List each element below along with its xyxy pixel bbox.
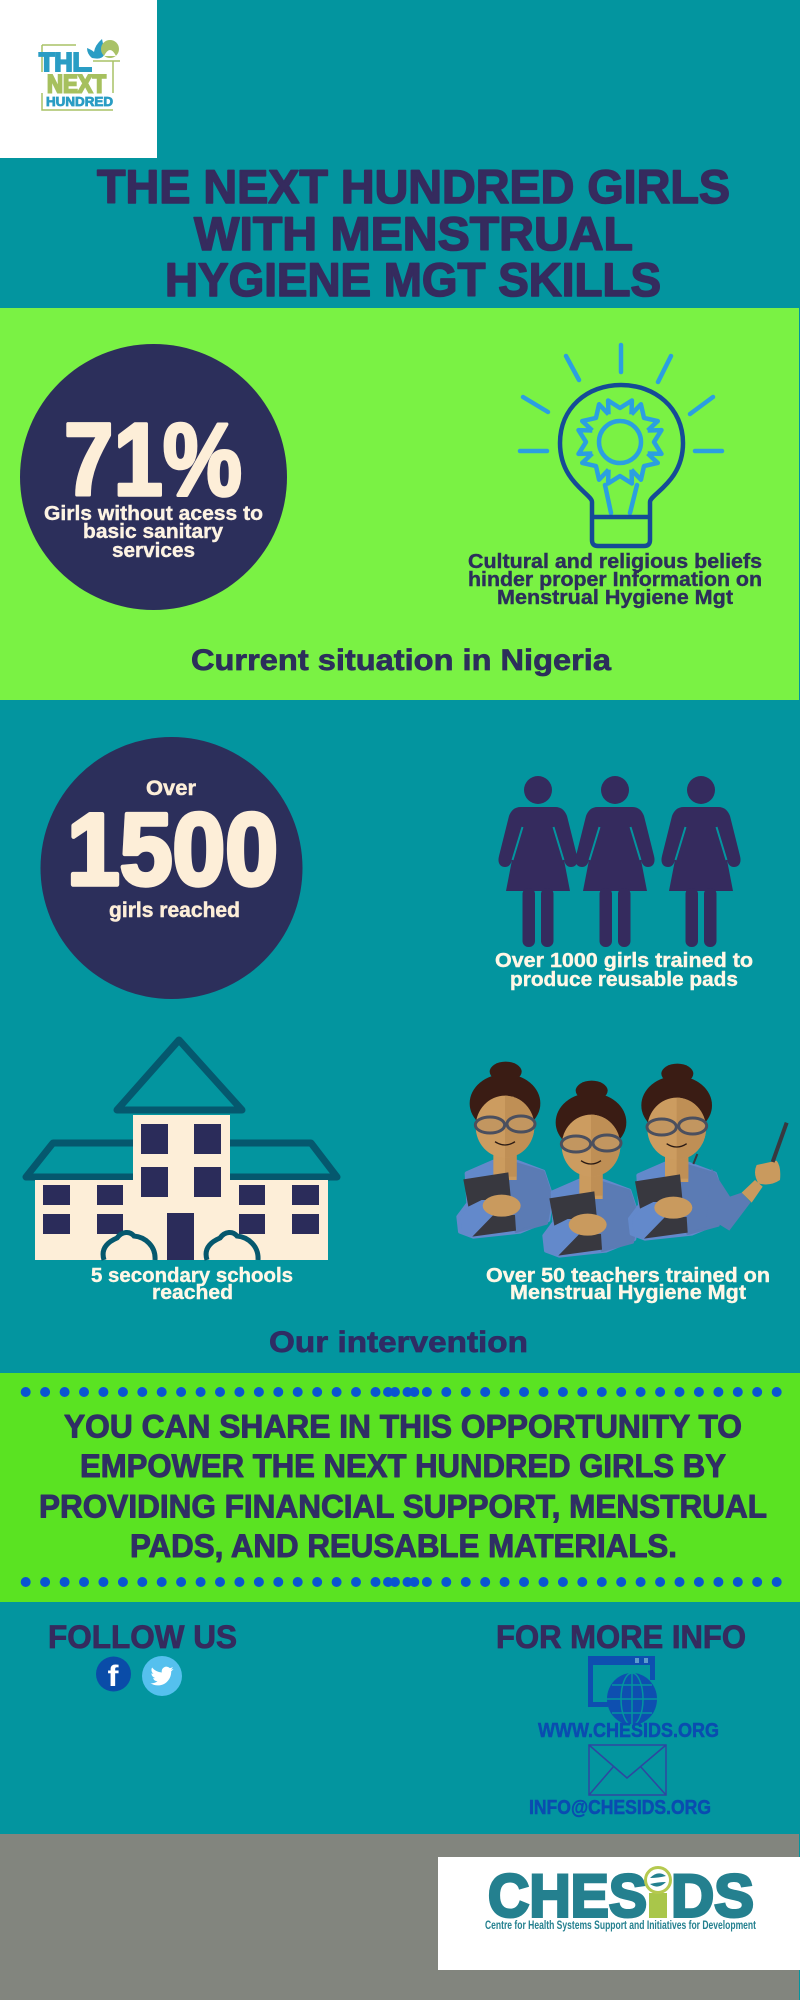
text: website: WWW.CHESIDS.ORG bbox=[538, 1720, 719, 1742]
icon: three girls bbox=[498, 776, 741, 947]
stat circle: 1500 girls reached: Over bbox=[146, 777, 196, 800]
title: WITH MENSTRUAL bbox=[194, 207, 633, 260]
icon: facebook bbox=[96, 1656, 131, 1693]
icon: envelope bbox=[589, 1745, 666, 1795]
call to action text: YOU CAN SHARE IN THIS OPPORTUNITY TO bbox=[64, 1408, 742, 1444]
text: 5 secondary schools reached: reached bbox=[152, 1282, 233, 1304]
panel: current situation in Nigeria bbox=[0, 308, 799, 700]
stat circle: 71 percent: 71% bbox=[64, 402, 242, 517]
stat circle: 1500 girls reached: 1500 bbox=[67, 792, 278, 906]
logo panel: The Next Hundred: HUNDRED bbox=[46, 94, 113, 109]
logo panel: CHESIDS: DS bbox=[671, 1862, 754, 1930]
text: over 1000 girls trained: produce reusable pads bbox=[510, 969, 738, 991]
text: cultural and religious beliefs bbox=[468, 551, 762, 609]
text: over 50 teachers trained bbox=[486, 1265, 770, 1304]
text: over 1000 girls trained bbox=[495, 950, 753, 991]
title: HYGIENE MGT SKILLS bbox=[165, 253, 661, 306]
heading: current situation in Nigeria: Current situation in Nigeria bbox=[191, 644, 611, 677]
title bbox=[97, 160, 730, 306]
call to action text: EMPOWER THE NEXT HUNDRED GIRLS BY bbox=[80, 1448, 726, 1484]
dotted divider: top bbox=[21, 1387, 782, 1397]
heading: for more info: FOR MORE INFO bbox=[496, 1619, 746, 1655]
text: over 50 teachers trained: Over 50 teachers trained on bbox=[486, 1265, 770, 1287]
icon: light bulb with gear bbox=[520, 345, 722, 546]
icon: three teachers bbox=[458, 1062, 787, 1256]
logo panel: CHESIDS bbox=[438, 1857, 800, 1970]
footer band bbox=[0, 1834, 799, 2000]
text: 5 secondary schools reached bbox=[91, 1265, 293, 1304]
stat circle: 71 percent: services bbox=[112, 540, 195, 562]
logo panel: CHESIDS: CHES bbox=[488, 1862, 647, 1930]
icon: facebook: f bbox=[108, 1660, 120, 1693]
heading: follow us: FOLLOW US bbox=[48, 1619, 237, 1655]
text: 5 secondary schools reached: 5 secondary schools bbox=[91, 1265, 293, 1287]
panel: call to action bbox=[0, 1373, 800, 1602]
text: over 1000 girls trained: Over 1000 girls trained to bbox=[495, 950, 753, 972]
stat circle: 1500 girls reached: girls reached bbox=[109, 899, 240, 922]
dotted divider: bottom bbox=[21, 1577, 782, 1587]
text: over 50 teachers trained: Menstrual Hygiene Mgt bbox=[510, 1282, 746, 1304]
text: cultural and religious beliefs: hinder proper Information on bbox=[468, 569, 762, 591]
icon: website window and globe bbox=[588, 1656, 657, 1725]
icon: twitter bbox=[142, 1656, 182, 1696]
heading: our intervention: Our intervention bbox=[269, 1326, 528, 1359]
call to action text: PADS, AND REUSABLE MATERIALS. bbox=[130, 1528, 677, 1564]
logo panel: The Next Hundred: THL bbox=[39, 47, 88, 77]
title: THE NEXT HUNDRED GIRLS bbox=[97, 160, 730, 213]
stat circle: 71 percent: Girls without acess to bbox=[44, 503, 263, 525]
logo panel: The Next Hundred: NEXT bbox=[47, 70, 106, 98]
icon: school building bbox=[26, 1040, 337, 1260]
text: cultural and religious beliefs: Cultural and religious beliefs bbox=[468, 551, 762, 573]
call to action text: PROVIDING FINANCIAL SUPPORT, MENSTRUAL bbox=[39, 1488, 767, 1524]
text: email: INFO@CHESIDS.ORG bbox=[529, 1797, 711, 1819]
call to action text bbox=[39, 1408, 767, 1564]
stat circle: 71 percent bbox=[20, 344, 287, 610]
stat circle: 1500 girls reached bbox=[40, 737, 302, 999]
stat circle: 71 percent: basic sanitary bbox=[83, 521, 224, 543]
logo panel: The Next Hundred bbox=[0, 0, 157, 158]
text: cultural and religious beliefs: Menstrual Hygiene Mgt bbox=[497, 587, 733, 609]
